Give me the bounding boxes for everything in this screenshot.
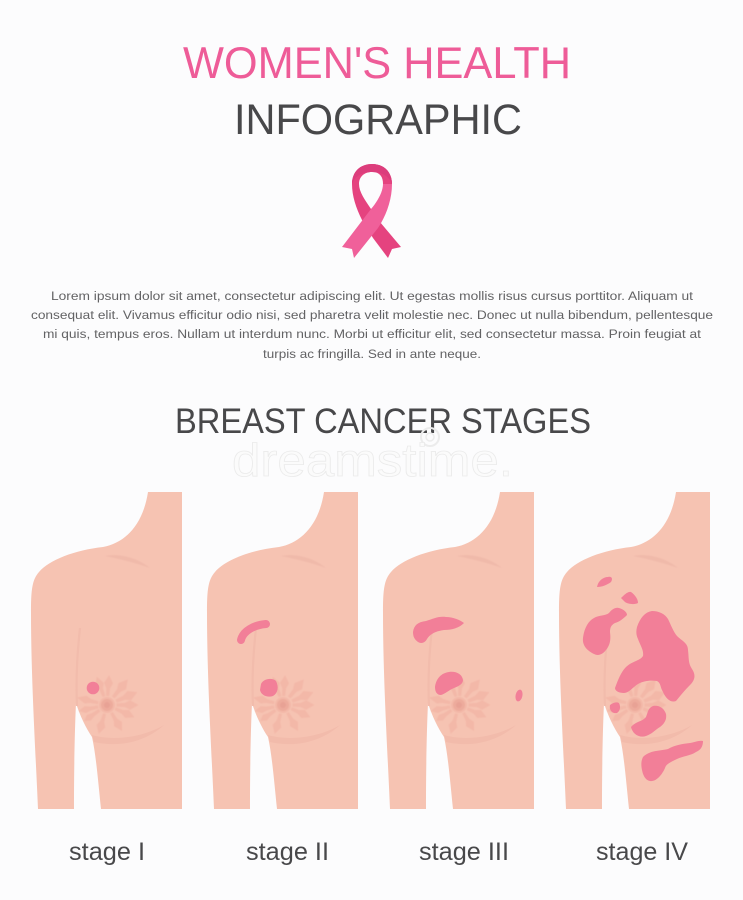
label: stage IV: stage IV: [596, 838, 688, 866]
watermark: dreamstime.: [232, 434, 513, 486]
title: women's health: WOMEN'S HEALTH: [183, 39, 571, 88]
title: infographic: INFOGRAPHIC: [234, 96, 522, 144]
tumor: stage II breast: [260, 679, 278, 697]
text block: lorem ipsum: [31, 289, 713, 361]
tumor: stage III side: [514, 689, 524, 702]
panel: stage II: [207, 492, 358, 809]
icon: pink awareness ribbon: [342, 164, 401, 258]
text block: lorem ipsum: consequat elit. Vivamus efficitur odio nisi, sed pharetra velit molestie nec. Donec ut nulla bibendum, pellentesque: [31, 308, 713, 322]
ribbon front band: [342, 184, 392, 258]
text block: lorem ipsum: turpis ac fringilla. Sed in ante neque.: [263, 347, 481, 361]
panel: stage I: [31, 492, 182, 809]
tumors: stage IV: [583, 577, 703, 781]
panel: stage III: [383, 492, 534, 809]
text block: lorem ipsum: Lorem ipsum dolor sit amet, consectetur adipiscing elit. Ut egestas mollis risus cursus porttitor. Aliquam ut: [51, 289, 694, 303]
ribbon loop top: [352, 164, 392, 184]
text block: lorem ipsum: mi quis, tempus eros. Nullam ut interdum nunc. Morbi ut efficitur elit, sed consectetur massa. Proin feugiat at: [43, 327, 702, 341]
tumor: stage II axilla: [241, 624, 266, 640]
tumor: stage III axilla: [413, 617, 464, 643]
tumor: stage III breast: [435, 672, 463, 695]
heading: breast cancer stages: BREAST CANCER STAGES: [175, 402, 591, 441]
label: stage III: stage III: [419, 838, 509, 866]
tumor: stage I: [87, 682, 99, 694]
panel: stage IV: [559, 492, 710, 809]
ribbon back band: [352, 164, 401, 258]
label: stage II: stage II: [246, 838, 329, 866]
label: stage I: stage I: [69, 838, 145, 866]
